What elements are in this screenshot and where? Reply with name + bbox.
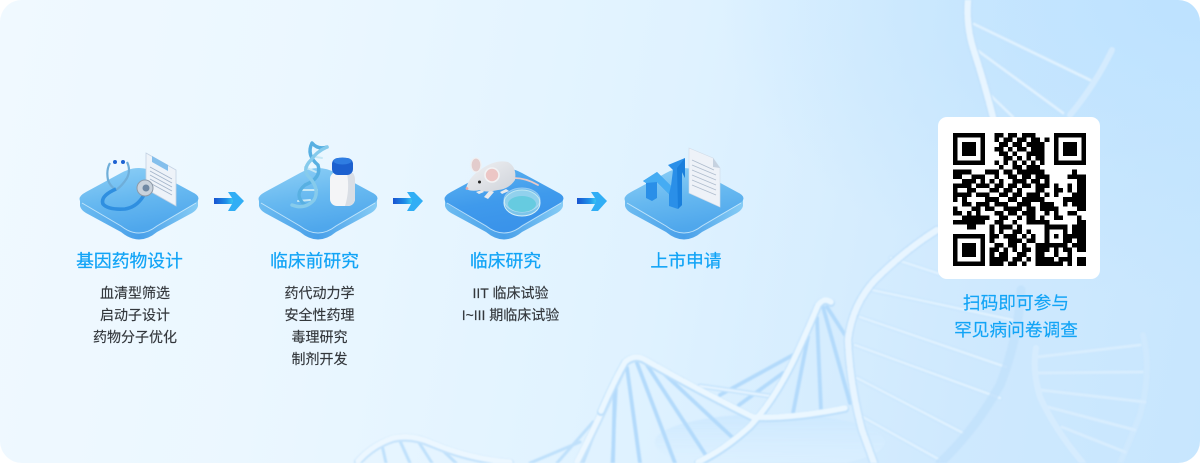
arrow 1 [214, 192, 244, 211]
clipboard [146, 153, 176, 206]
mini DNA [292, 143, 327, 207]
heading: 基因药物设计: 基因药物设计 [76, 251, 183, 271]
text block: step 3 items: I~III 期临床试验 [462, 307, 559, 323]
arrow 2 [393, 192, 423, 211]
text block: step 2 items: 药代动力学 [284, 285, 354, 301]
panel: step 3 clinical research [444, 158, 564, 323]
large right helix rungs [855, 24, 1090, 460]
icon: stethoscope and clipboard on platform [80, 152, 198, 240]
panel: step 2 preclinical research [258, 141, 378, 367]
centre helix backbones [601, 301, 845, 463]
text block: step 3 items [462, 285, 559, 323]
text block: step 1 items: 启动子设计 [100, 307, 170, 323]
panel: step 4 marketing application [624, 148, 744, 271]
text block: step 2 items: 制剂开发 [292, 351, 348, 367]
icon: mouse and petri dish on platform [444, 158, 564, 240]
text block: QR caption: 扫码即可参与 [963, 293, 1069, 313]
far-left helix [382, 380, 617, 463]
heading: 临床前研究: 临床前研究 [270, 251, 359, 271]
heading: 上市申请: 上市申请 [650, 251, 722, 271]
stethoscope [107, 162, 129, 190]
text block: step 1 items: 药物分子优化 [93, 329, 177, 345]
icon: rising chart and document on platform [624, 148, 744, 240]
feet [476, 189, 509, 199]
small right helix [1037, 345, 1145, 452]
document [689, 148, 720, 207]
centre helix rungs [613, 307, 850, 463]
petri dish [504, 190, 540, 216]
QR code [953, 133, 1086, 266]
chart arrow [643, 158, 685, 209]
text block: step 1 items [93, 285, 177, 345]
panel: QR code card [938, 117, 1100, 279]
text block: QR caption [954, 293, 1078, 340]
tail [514, 178, 538, 185]
mouse body [466, 161, 515, 192]
text block: step 2 items: 毒理研究 [292, 329, 348, 345]
text block: step 2 items: 安全性药理 [284, 307, 354, 323]
arrow 3 [577, 192, 607, 211]
text block: step 3 items: IIT 临床试验 [473, 285, 548, 301]
pill bottle [330, 172, 355, 206]
icon: DNA and pill bottle on platform [258, 141, 378, 240]
text block: QR caption: 罕见病问卷调查 [954, 320, 1078, 340]
heading: 临床研究: 临床研究 [470, 251, 541, 271]
text block: step 1 items: 血清型筛选 [100, 285, 170, 301]
text block: step 2 items [284, 285, 354, 367]
panel: step 1 gene drug design [76, 152, 198, 345]
